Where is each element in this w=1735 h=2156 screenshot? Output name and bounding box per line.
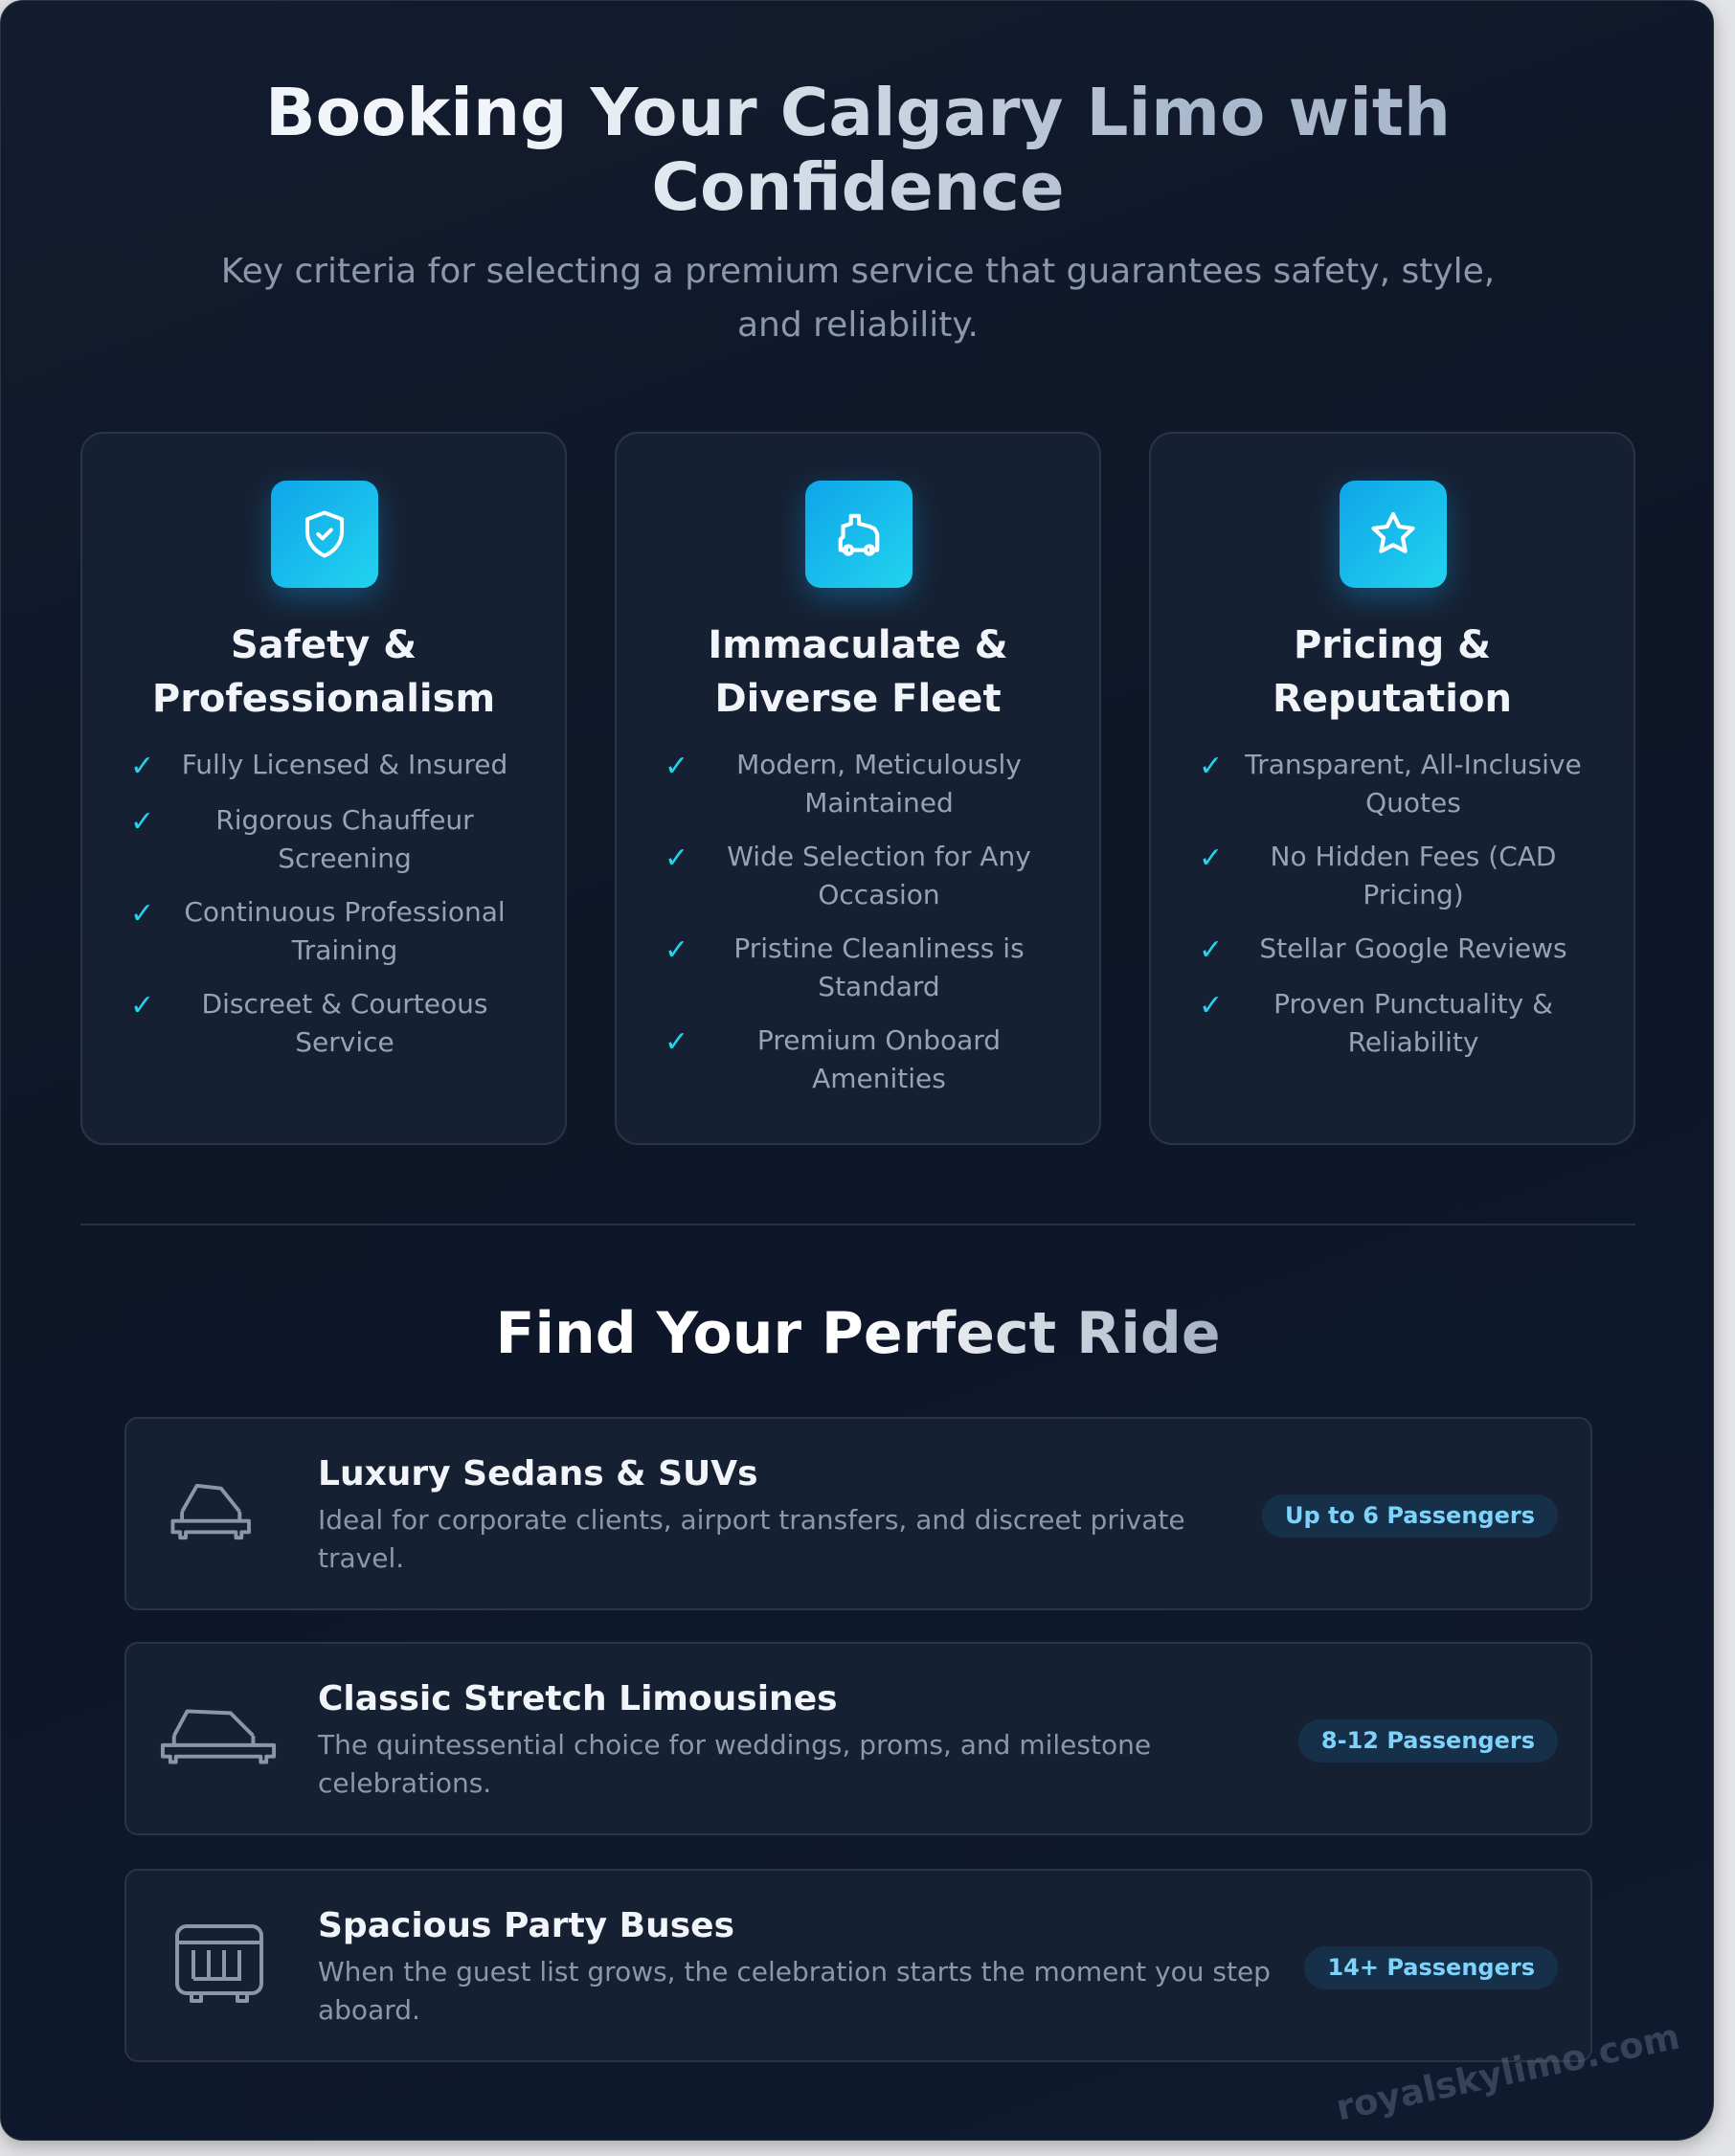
icon: bus bbox=[175, 1924, 263, 2003]
heading: fleet bbox=[708, 623, 1008, 721]
title: party buses: Spacious Party Buses bbox=[318, 1906, 734, 1945]
heading: fleet: Diverse Fleet bbox=[714, 677, 1002, 721]
heading: safety bbox=[152, 623, 495, 721]
subtitle: Key criteria for selecting a premium service that guarantees safety, style, and reliability. bbox=[221, 252, 1495, 345]
badge: sedans bbox=[1262, 1494, 1558, 1538]
list: safety: Fully Licensed & Insured bbox=[182, 749, 507, 780]
list: fleet: ✓ bbox=[665, 1025, 688, 1059]
list: pricing: ✓ bbox=[1199, 989, 1223, 1022]
list: fleet: ✓ bbox=[665, 750, 688, 783]
list: pricing: Transparent, All-Inclusive Quotes bbox=[1245, 749, 1582, 819]
icon: star bbox=[1340, 481, 1447, 588]
list: pricing: Proven Punctuality & Reliability bbox=[1273, 988, 1553, 1058]
title: Confidence bbox=[651, 149, 1065, 226]
title bbox=[1, 76, 1715, 225]
list: fleet: ✓ bbox=[665, 933, 688, 967]
list: safety: ✓ bbox=[130, 897, 154, 931]
title: limousines: Classic Stretch Limousines bbox=[318, 1679, 838, 1718]
title: sedans: Luxury Sedans & SUVs bbox=[318, 1454, 758, 1493]
heading: find your perfect ride bbox=[1, 1295, 1715, 1372]
list: fleet: ✓ bbox=[665, 842, 688, 875]
list: pricing: ✓ bbox=[1199, 750, 1223, 783]
icon: car bbox=[805, 481, 913, 588]
heading: pricing: Pricing & bbox=[1294, 623, 1491, 667]
badge: sedans: Up to 6 Passengers bbox=[1285, 1502, 1535, 1529]
heading: find your perfect ride: Find Your Perfect Ride bbox=[495, 1300, 1221, 1367]
list: pricing: Stellar Google Reviews bbox=[1259, 932, 1567, 964]
list: fleet: Pristine Cleanliness is Standard bbox=[733, 932, 1025, 1002]
list: safety: Rigorous Chauffeur Screening bbox=[215, 804, 474, 874]
list: safety: ✓ bbox=[130, 989, 154, 1022]
list: fleet: Modern, Meticulously Maintained bbox=[736, 749, 1022, 819]
badge: limousines: 8-12 Passengers bbox=[1321, 1727, 1535, 1754]
desc: party buses: When the guest list grows, the celebration starts the moment you step aboard. bbox=[318, 1956, 1271, 2026]
row: sedans bbox=[124, 1417, 1592, 1610]
panel: safety bbox=[80, 432, 567, 1145]
list: pricing: No Hidden Fees (CAD Pricing) bbox=[1271, 841, 1556, 910]
panel: fleet bbox=[615, 432, 1101, 1145]
row: limousines bbox=[124, 1642, 1592, 1835]
list: pricing bbox=[1199, 749, 1582, 1058]
desc: sedans: Ideal for corporate clients, airport transfers, and discreet private travel. bbox=[318, 1504, 1185, 1574]
badge: party buses: 14+ Passengers bbox=[1327, 1954, 1535, 1981]
watermark: royalskylimo.com bbox=[1333, 2015, 1683, 2129]
icon: sedan bbox=[170, 1484, 251, 1539]
list: pricing: ✓ bbox=[1199, 842, 1223, 875]
row: party buses bbox=[124, 1869, 1592, 2062]
heading: safety: Safety & bbox=[231, 623, 417, 667]
panel: pricing bbox=[1149, 432, 1635, 1145]
icon: limo bbox=[161, 1710, 276, 1763]
list: fleet: Premium Onboard Amenities bbox=[757, 1024, 1001, 1094]
badge: party buses bbox=[1304, 1946, 1558, 1989]
list: pricing: ✓ bbox=[1199, 933, 1223, 967]
icon: shield bbox=[271, 481, 378, 588]
heading: pricing: Reputation bbox=[1273, 677, 1512, 721]
list: fleet bbox=[665, 749, 1031, 1094]
desc: limousines: The quintessential choice for weddings, proms, and milestone celebrations. bbox=[318, 1729, 1151, 1799]
list: safety bbox=[130, 749, 507, 1058]
list: safety: Continuous Professional Training bbox=[184, 896, 506, 966]
heading: fleet: Immaculate & bbox=[708, 623, 1008, 667]
list: safety: ✓ bbox=[130, 750, 154, 783]
list: safety: Discreet & Courteous Service bbox=[202, 988, 487, 1058]
list: fleet: Wide Selection for Any Occasion bbox=[727, 841, 1031, 910]
badge: limousines bbox=[1298, 1719, 1558, 1763]
heading: safety: Professionalism bbox=[152, 677, 495, 721]
heading: pricing bbox=[1273, 623, 1512, 721]
list: safety: ✓ bbox=[130, 805, 154, 839]
title: Booking Your Calgary Limo with bbox=[265, 75, 1451, 151]
